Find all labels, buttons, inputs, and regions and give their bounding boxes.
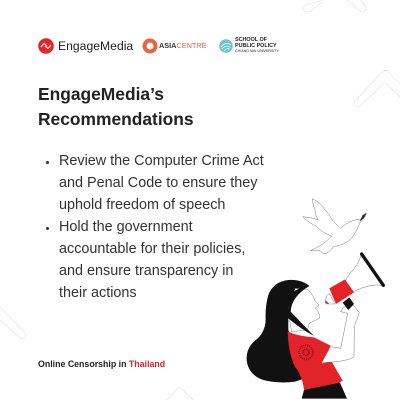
icon: EngageMedia mark [38,38,54,54]
shirt emblem [299,345,313,359]
bullet list: their actions [59,285,137,301]
footer label: Online Censorship in Thailand [38,359,165,369]
arm [322,305,359,363]
bullet list: Review the Computer Crime Act [59,153,264,169]
illustration: woman with megaphone [246,252,386,399]
bullet list: and Penal Code to ensure they [59,175,257,191]
bullet list: and ensure transparency in [59,263,233,279]
bullet list: Hold the government [59,219,193,235]
logo: School of Public Policy [219,37,279,53]
megaphone handle [343,297,354,310]
heading: Recommendations [38,109,194,129]
logo: EngageMedia [38,38,134,54]
face [288,288,319,332]
illustration: dove [302,198,367,254]
bullet list [46,153,264,301]
bullet list: accountable for their policies, [59,241,245,257]
megaphone bell [345,254,383,292]
shirt [288,332,343,390]
logo wordmark: SCHOOL OF [235,37,267,43]
icon: fingerprint mark [219,39,233,53]
bullet list: uphold freedom of speech [59,197,225,213]
logo wordmark: PUBLIC POLICY [235,42,277,48]
logo: Asia Centre [142,38,206,54]
megaphone body [329,279,354,304]
heading: EngageMedia’s [38,84,164,104]
logo wordmark: ASIACENTRE [159,41,206,50]
logo wordmark: CHIANG MAI UNIVERSITY [235,49,279,53]
icon: Asia Centre ring [142,38,158,54]
heading [38,84,194,129]
logo wordmark: EngageMedia [58,39,133,53]
logo wordmark [235,37,279,53]
hair back [247,280,309,383]
hair strand [281,286,314,336]
pants [302,383,347,399]
